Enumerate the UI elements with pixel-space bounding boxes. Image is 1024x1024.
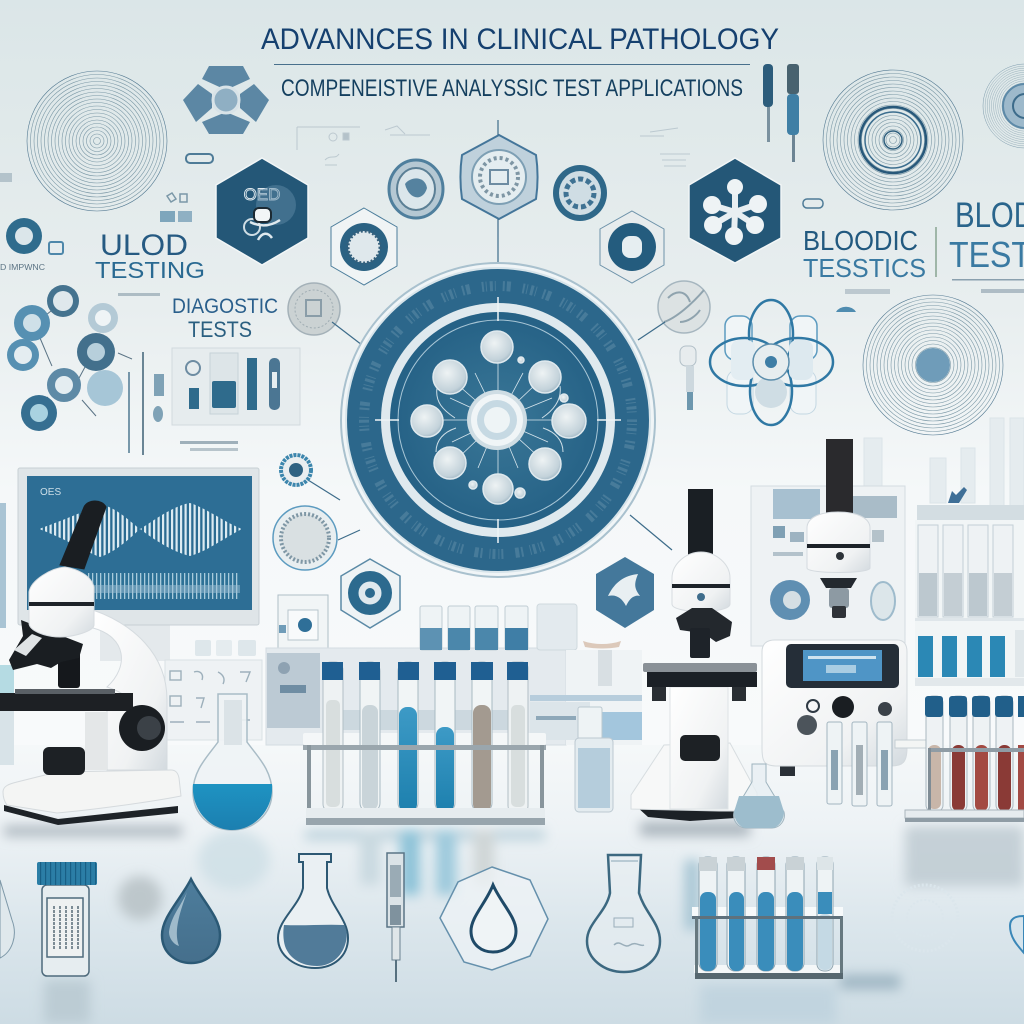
title: ADVANNCES IN CLINICAL PATHOLOGY — [261, 23, 779, 56]
label: ulod testing — [95, 229, 205, 283]
small graduated cylinder — [575, 707, 613, 812]
icon: vials left of centre — [129, 352, 164, 455]
icon: hexagon drop — [440, 867, 548, 970]
label: ulod testing: ULOD — [100, 229, 188, 262]
label: ulod testing: TESTING — [95, 257, 205, 283]
icon: conical flask — [278, 854, 348, 968]
small label chips: D IMPWNC — [0, 263, 45, 272]
right test tube rack with red samples — [895, 696, 1024, 822]
connector lines — [308, 120, 672, 550]
icon: top center hexagon — [460, 135, 538, 219]
icon: water drop — [162, 879, 220, 963]
title rule — [274, 64, 750, 65]
icon: round badge two — [553, 165, 607, 221]
icon: small sample circle — [288, 283, 340, 335]
label: bloodic testics: BLOODIC — [803, 225, 918, 256]
central circular diagram — [341, 263, 655, 577]
monitor with waveform: OES — [40, 487, 61, 498]
panel: small box below monitor — [278, 595, 328, 648]
label: blod testing — [935, 196, 1024, 280]
icon: edge flask left — [0, 880, 14, 958]
bench surface — [0, 745, 1024, 1024]
icon: circular specimen right — [658, 281, 710, 333]
icon: atom right — [710, 300, 833, 425]
icon: bottle with label — [37, 862, 97, 976]
left edge shelving — [0, 503, 14, 765]
concentric ring graphic: top right — [823, 70, 963, 210]
label: diagnostic tests: DIAGOSTIC — [172, 295, 278, 318]
icon: hexagon lab left: OED — [244, 185, 280, 204]
round flask centre left — [193, 694, 272, 830]
centrifuge analyzer device — [762, 640, 907, 776]
icon: hexagon badge right — [600, 211, 664, 283]
subtitle: COMPENEISTIVE ANALYSSIC TEST APPLICATIONS — [281, 75, 743, 102]
icon: pipettes top right — [763, 64, 799, 162]
small beaker near centre microscope — [734, 764, 784, 828]
icon: hexagon lab left — [216, 158, 308, 265]
icon: hexagon outline left — [331, 208, 397, 285]
panel: diagnostic tube strip — [172, 348, 300, 425]
background shelf with instruments — [266, 604, 642, 745]
label: bloodic testics: TESSTICS — [803, 253, 926, 283]
central cell and rays — [430, 352, 568, 490]
test tube rack centre — [303, 662, 546, 825]
icon: bottom test tube rack — [692, 857, 843, 979]
label: diagnostic tests: TESTS — [188, 317, 252, 342]
pale glassware behind right instruments — [864, 418, 1024, 506]
icon: hexagon flower top left — [183, 66, 269, 134]
icon: small round badge — [281, 455, 311, 485]
icon: hexagon badge lower right — [596, 557, 654, 628]
icon: hexagon molecule right — [689, 158, 781, 263]
monitor with waveform — [18, 468, 259, 625]
icon cluster: left molecules — [6, 218, 132, 431]
background cabinet — [100, 625, 262, 740]
icon: syringe — [387, 853, 404, 982]
icon: hexagon badge lower left — [341, 559, 400, 628]
small label chips — [0, 154, 1024, 451]
ring of cell spheres — [411, 331, 586, 504]
concentric ring graphic: top left — [27, 71, 167, 211]
label: bloodic testics — [803, 225, 926, 283]
hanging microscope head — [807, 439, 870, 618]
slim sample tubes near analyzer — [827, 722, 892, 806]
faint sketches near top — [297, 126, 690, 166]
right shelf with tubes — [915, 505, 1024, 686]
concentric ring graphic: right middle — [863, 295, 1003, 435]
icon: circular specimen lower left — [273, 506, 337, 570]
centre right microscope — [631, 489, 757, 821]
icon: edge drop right — [1010, 916, 1024, 953]
icon: small pipette right — [680, 346, 696, 410]
right instrument tower — [751, 486, 905, 646]
icon: round badge one — [389, 160, 443, 218]
left microscope — [0, 501, 181, 825]
icon: round flask outline — [587, 855, 660, 972]
concentric ring graphic: far right edge — [983, 64, 1024, 148]
label: diagnostic tests — [172, 295, 278, 342]
